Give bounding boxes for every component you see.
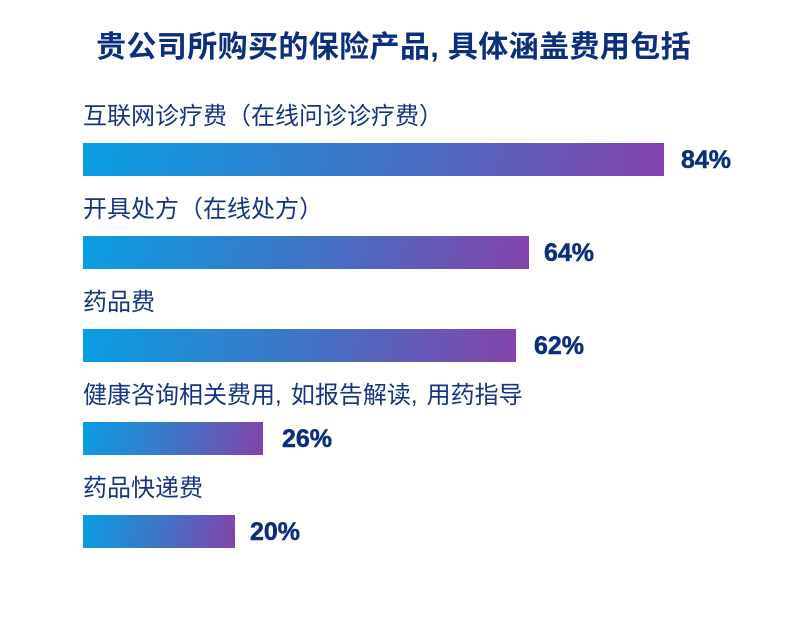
bar: health consultation [83,422,263,455]
title: 贵公司所购买的保险产品, 具体涵盖费用包括 [96,31,691,64]
label: health consultation: 健康咨询相关费用, 如报告解读, 用药指导 [83,382,523,409]
value: 62%: 62% [534,332,584,360]
value: 26%: 26% [282,425,332,453]
value: 20%: 20% [250,518,300,546]
label: online consultation: 互联网诊疗费（在线问诊诊疗费） [83,103,443,130]
bar: medicine delivery [83,515,235,548]
value: 84%: 84% [681,146,731,174]
bar: online consultation [83,143,664,176]
value: 64%: 64% [544,239,594,267]
bar: prescriptions [83,236,529,269]
label: medicine delivery: 药品快递费 [83,475,203,502]
bar: medicine cost [83,329,516,362]
label: prescriptions: 开具处方（在线处方） [83,196,323,223]
label: medicine cost: 药品费 [83,289,155,316]
